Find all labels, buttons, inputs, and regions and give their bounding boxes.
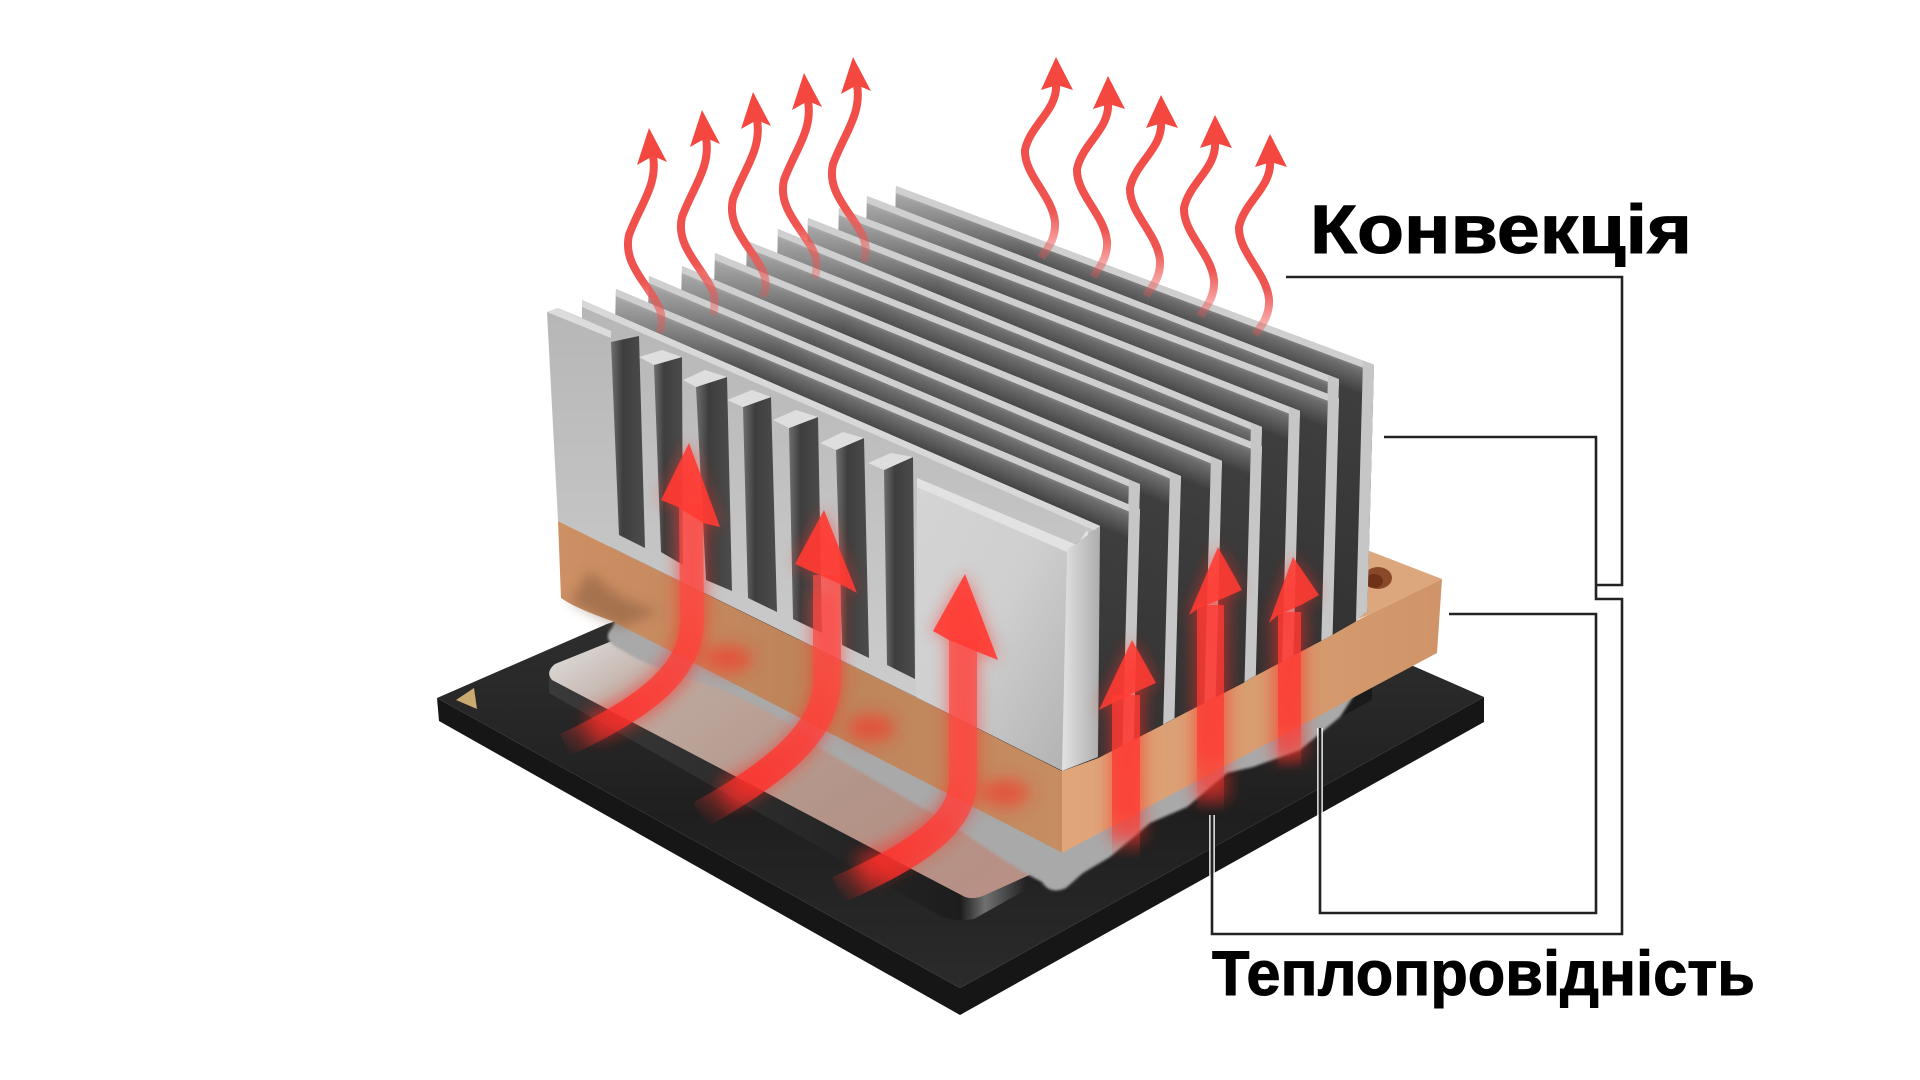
fin 5 bbox=[674, 266, 1181, 771]
copper base bbox=[558, 521, 1442, 853]
fin 7 bbox=[746, 242, 1262, 771]
label: conduction: Теплопровідність bbox=[1212, 939, 1755, 1009]
heat sink diagram bbox=[437, 57, 1753, 1015]
slot 4 bbox=[727, 390, 777, 612]
leader lines bbox=[1212, 277, 1622, 934]
slot 3 bbox=[683, 370, 732, 591]
thermal paste bbox=[608, 610, 1353, 890]
metal lid bbox=[549, 640, 1372, 920]
wavy arrow 4 bbox=[783, 73, 822, 278]
heat conduction arrows: soft glow bbox=[590, 443, 1319, 870]
wavy arrow 7 bbox=[1077, 76, 1125, 277]
arrow: straight conduction 5 bbox=[1189, 547, 1242, 813]
fin 4 bbox=[642, 276, 1140, 771]
front right plate bbox=[916, 478, 1100, 771]
chip substrate bbox=[437, 560, 1484, 1015]
fin 8 bbox=[777, 229, 1262, 771]
slot 5 bbox=[773, 410, 822, 633]
fin 11 bbox=[866, 196, 1339, 730]
fin 3 bbox=[609, 289, 1140, 771]
wavy arrow 6 bbox=[1025, 57, 1073, 258]
copper mounting hole bbox=[1364, 567, 1392, 589]
wavy arrow 3 bbox=[732, 92, 771, 297]
convection arrows right group bbox=[1025, 57, 1287, 335]
slot 6 bbox=[820, 432, 869, 658]
arrow: curved conduction 2 bbox=[700, 510, 857, 815]
arrow: curved conduction 1 bbox=[565, 443, 720, 745]
arrow: straight conduction 4 bbox=[1099, 640, 1156, 860]
label: convection: Конвекція bbox=[1310, 191, 1692, 268]
wavy arrow 8 bbox=[1130, 95, 1178, 296]
slot 7 bbox=[868, 453, 915, 679]
wavy arrow 10 bbox=[1239, 134, 1287, 335]
icon: gold corner triangle bbox=[456, 688, 477, 709]
left plate top edge bbox=[547, 308, 611, 338]
front silver wall with slots bbox=[547, 300, 1100, 771]
arrow: straight conduction 6 bbox=[1269, 557, 1319, 770]
slot 2 bbox=[639, 350, 683, 565]
wavy arrow 2 bbox=[681, 110, 720, 315]
fin 12 bbox=[895, 186, 1374, 718]
slot 1 bbox=[611, 336, 645, 548]
wavy arrow 5 bbox=[832, 57, 871, 262]
fin 2 top strip bbox=[582, 300, 1100, 533]
fin 6 bbox=[714, 253, 1222, 771]
fin 9 bbox=[808, 218, 1300, 760]
convection arrows left group bbox=[628, 57, 871, 333]
fins bbox=[609, 186, 1374, 771]
fin 10 bbox=[838, 208, 1339, 730]
wavy arrow 1 bbox=[628, 128, 667, 333]
wavy arrow 9 bbox=[1184, 115, 1232, 316]
arrow: curved conduction 3 bbox=[838, 574, 998, 890]
